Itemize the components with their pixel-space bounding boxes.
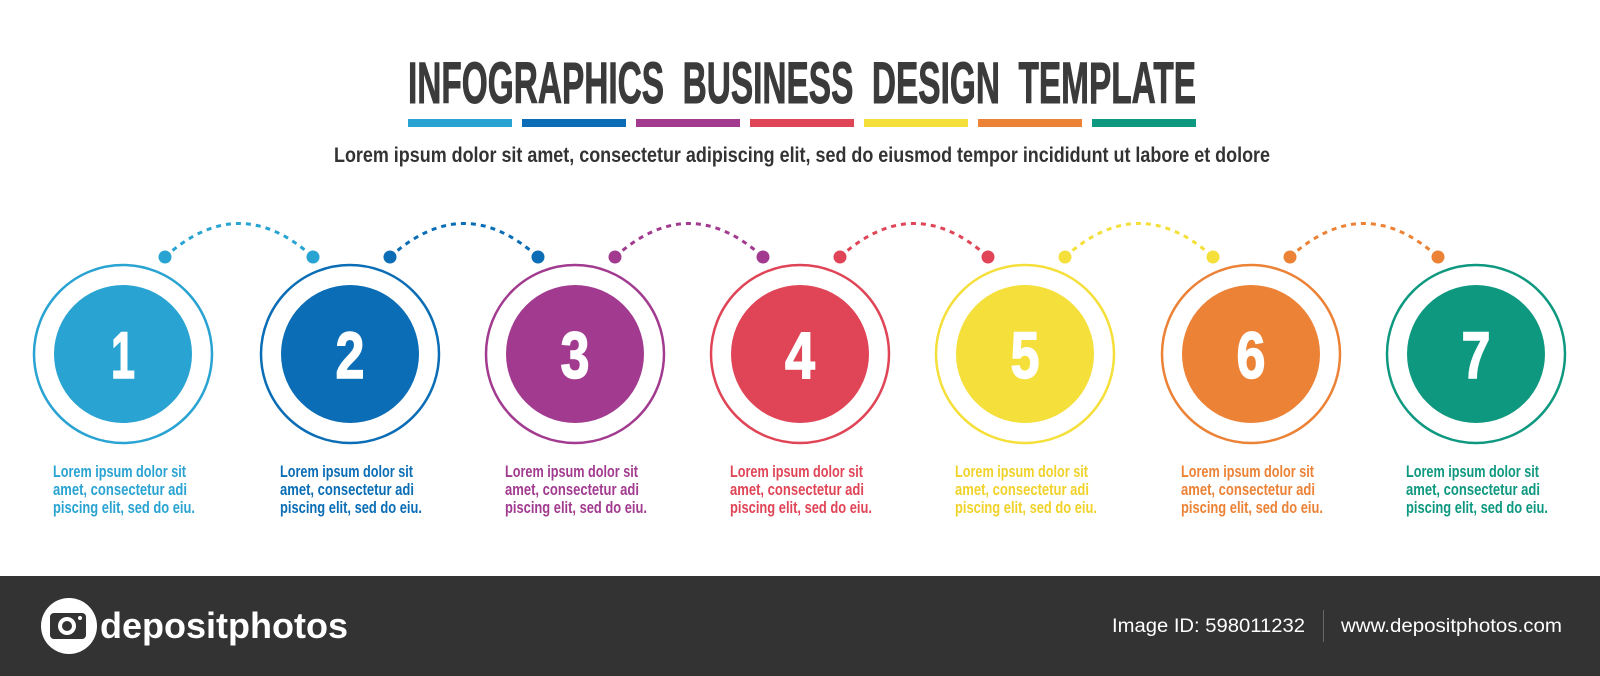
text 6: piscing elit, sed do eiu.	[1181, 498, 1323, 517]
step 7: 7	[1462, 318, 1490, 392]
connector arc 4	[834, 224, 994, 264]
connector arc 6	[1284, 224, 1444, 264]
website url: www.depositphotos.com	[1340, 616, 1562, 637]
text 3: Lorem ipsum dolor sit	[505, 462, 638, 481]
connector arc 1	[158, 224, 320, 264]
text 4: piscing elit, sed do eiu.	[730, 498, 872, 517]
text 2: Lorem ipsum dolor sit	[280, 462, 413, 481]
color bars	[408, 119, 1196, 127]
step 7	[1387, 265, 1565, 517]
footer bar	[0, 576, 1600, 676]
text 7: Lorem ipsum dolor sit	[1406, 462, 1539, 481]
connector arc 3	[608, 224, 770, 264]
text 4: Lorem ipsum dolor sit	[730, 462, 863, 481]
text 1: Lorem ipsum dolor sit	[53, 462, 186, 481]
text 3: amet, consectetur adi	[505, 480, 639, 499]
step 6: 6	[1236, 318, 1266, 392]
image id: Image ID: 598011232	[1112, 616, 1305, 637]
connector arc 2	[384, 224, 544, 264]
text 5: amet, consectetur adi	[955, 480, 1089, 499]
logo text: depositphotos	[100, 605, 348, 646]
step 4	[711, 224, 994, 517]
text 1: amet, consectetur adi	[53, 480, 187, 499]
text 3: piscing elit, sed do eiu.	[505, 498, 647, 517]
text 6: amet, consectetur adi	[1181, 480, 1315, 499]
step 2	[261, 224, 544, 517]
step 2: 2	[336, 318, 364, 392]
connector arc 5	[1058, 224, 1220, 264]
subtitle: Lorem ipsum dolor sit amet, consectetur adipiscing elit, sed do eiusmod tempor incididunt ut labore et dolore	[334, 144, 1270, 167]
text 4: amet, consectetur adi	[730, 480, 864, 499]
text 5: Lorem ipsum dolor sit	[955, 462, 1088, 481]
step 5	[936, 224, 1220, 517]
text 6: Lorem ipsum dolor sit	[1181, 462, 1314, 481]
text 1: piscing elit, sed do eiu.	[53, 498, 195, 517]
step 3: 3	[560, 318, 590, 392]
step 4: 4	[785, 318, 815, 392]
step 5: 5	[1010, 318, 1040, 392]
text 7: piscing elit, sed do eiu.	[1406, 498, 1548, 517]
step 1	[34, 224, 320, 517]
text 2: piscing elit, sed do eiu.	[280, 498, 422, 517]
step 6	[1162, 224, 1444, 517]
icon: camera logo	[41, 598, 97, 654]
text 5: piscing elit, sed do eiu.	[955, 498, 1097, 517]
step 1: 1	[111, 318, 135, 392]
step 3	[486, 224, 770, 517]
text 2: amet, consectetur adi	[280, 480, 414, 499]
text 7: amet, consectetur adi	[1406, 480, 1540, 499]
